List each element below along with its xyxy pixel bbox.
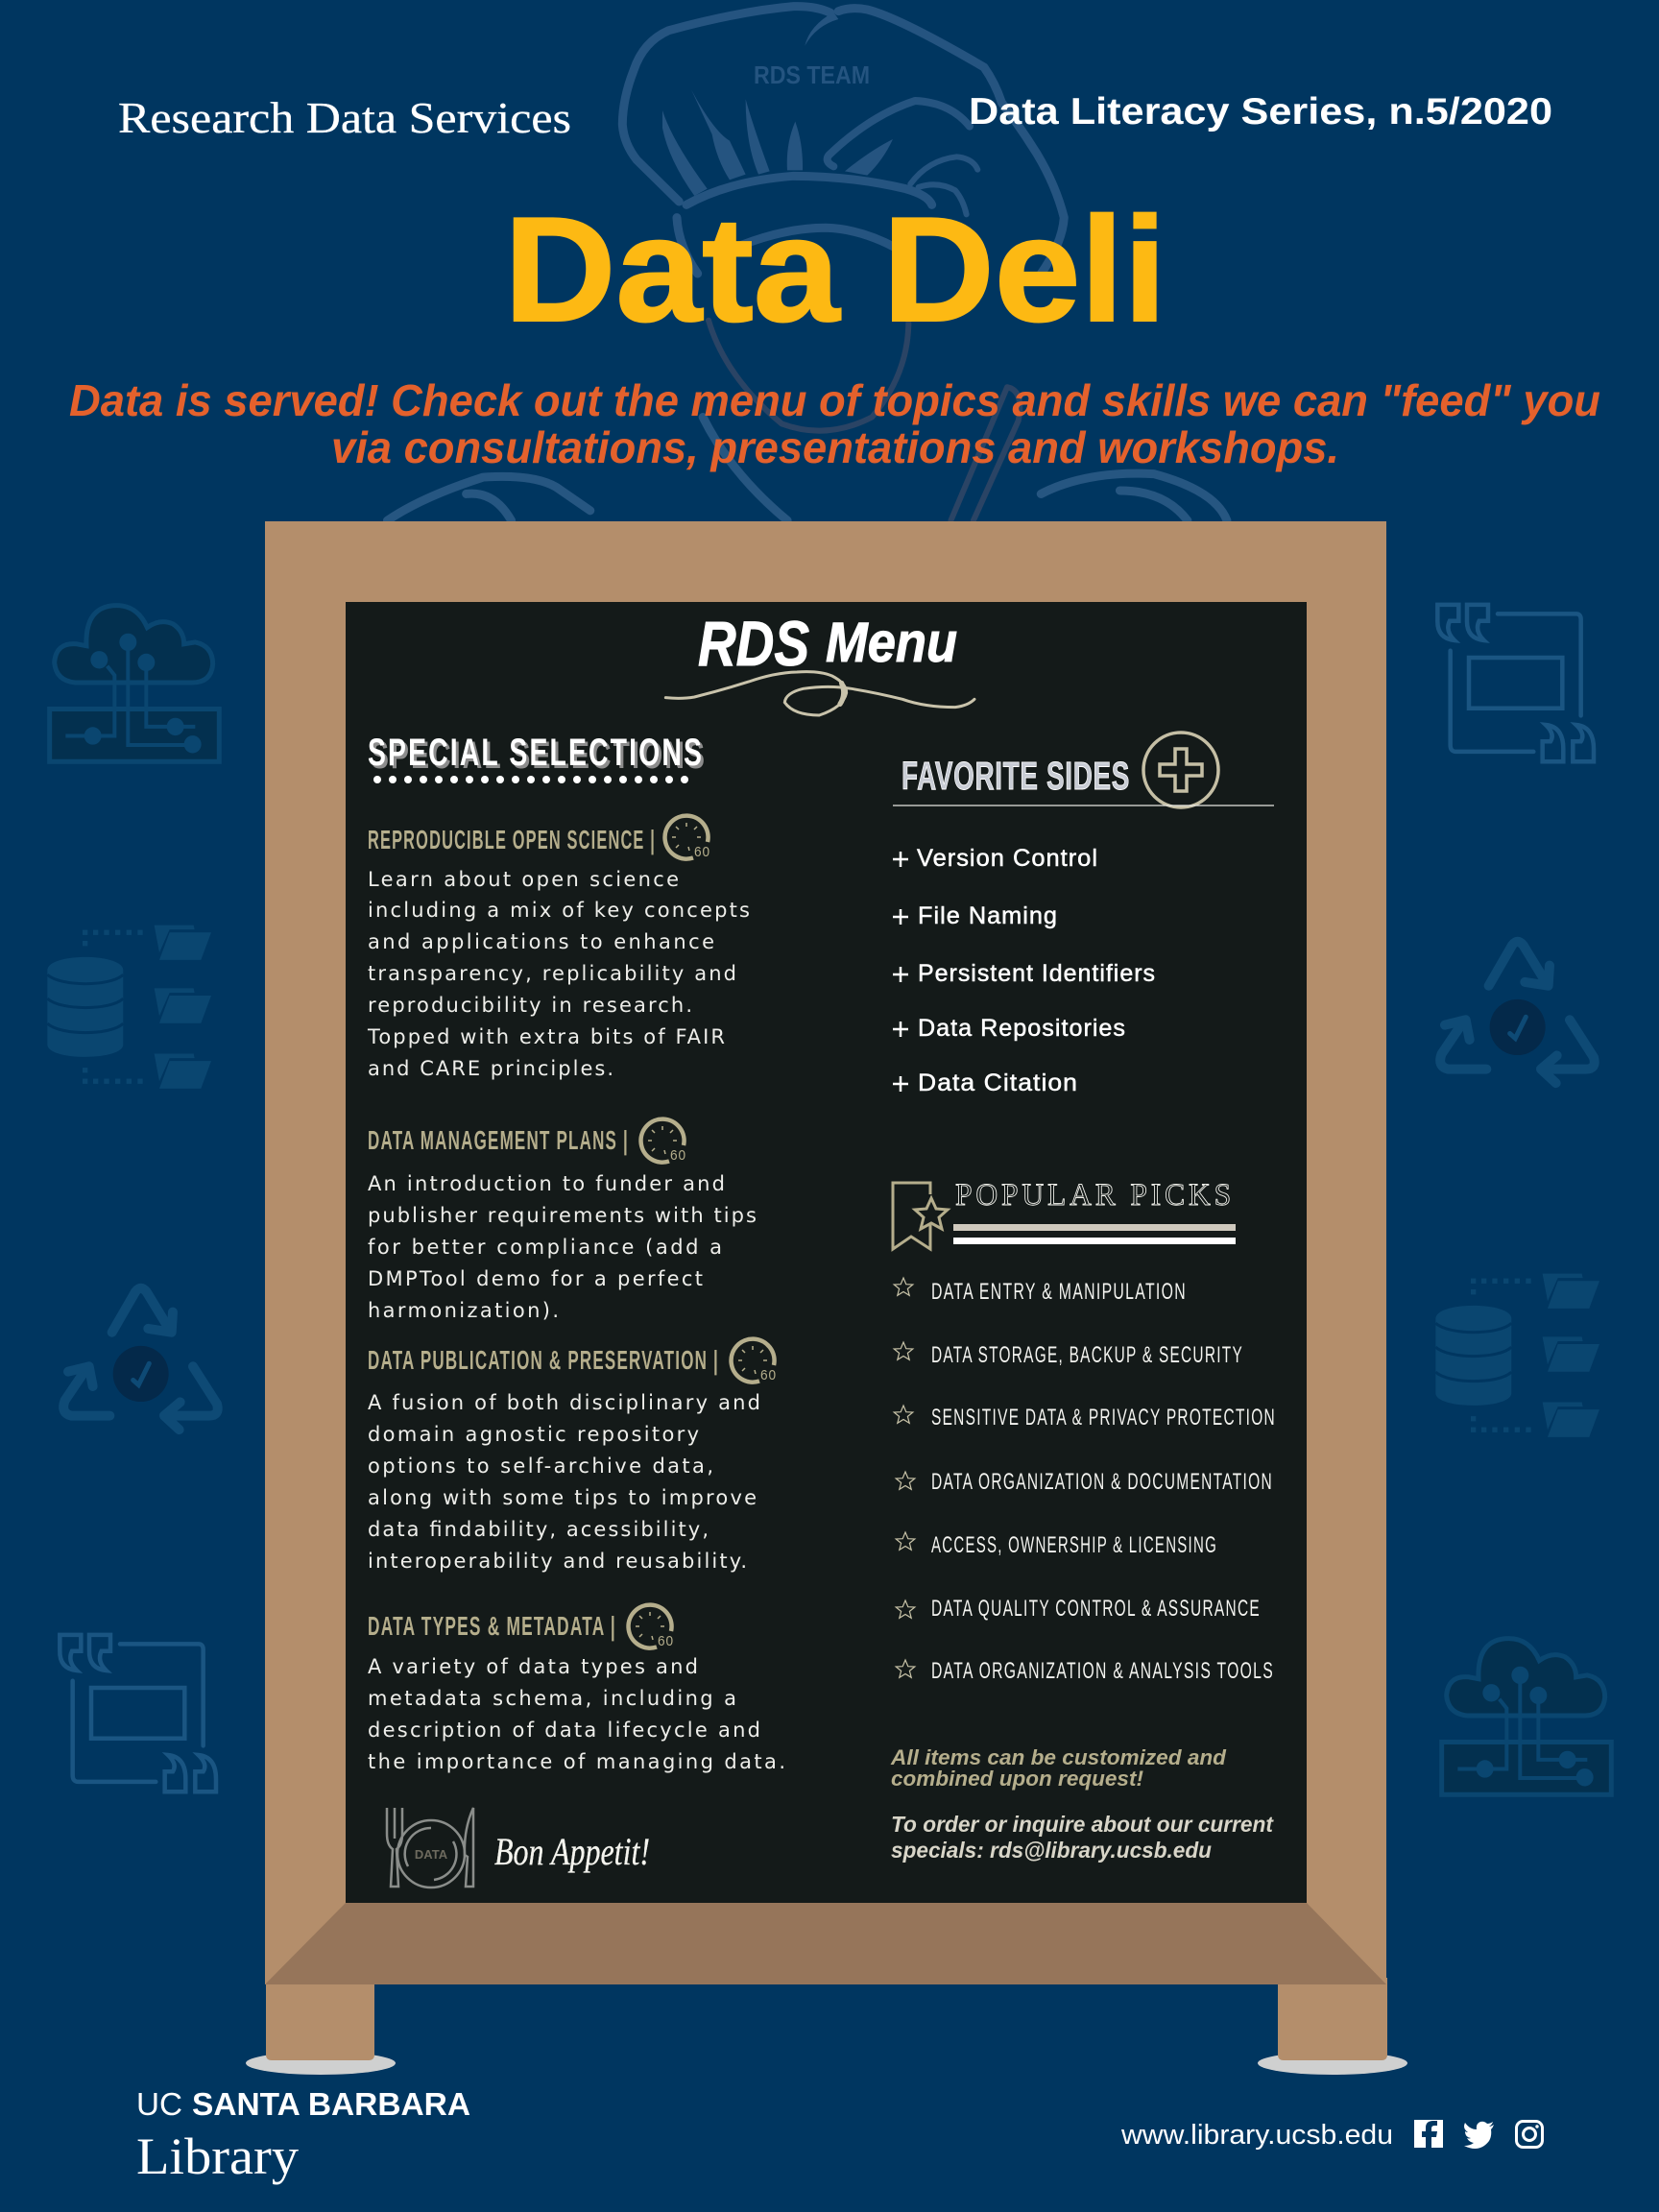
section: data types and metadata: [368, 1605, 785, 1773]
list of picks: DATA ENTRY & MANIPULATION: [931, 1279, 1187, 1305]
list of picks: [894, 1278, 1276, 1684]
list of sides: Data Repositories: [918, 1015, 1126, 1042]
logo: UC Santa Barbara Library: SANTA BARBARA: [192, 2086, 470, 2122]
section: data types and metadata: the importance of managing data.: [368, 1750, 785, 1773]
icon: bookmark star: [893, 1183, 948, 1249]
section: data management plans: publisher requirements with tips: [368, 1204, 757, 1227]
section: data publication and preservation: DATA PUBLICATION & PRESERVATION |: [368, 1345, 719, 1375]
section: reproducible open science: including a mix of key concepts: [368, 899, 750, 922]
icon: cloud left: [50, 606, 219, 761]
header: Research Data Services: Research Data Services: [118, 93, 571, 142]
section: data publication and preservation: 60: [760, 1367, 777, 1383]
icon: plate and cutlery: [387, 1808, 473, 1887]
note: customization: combined upon request!: [891, 1767, 1143, 1791]
subtitle: via consultations, presentations and workshops.: [331, 422, 1339, 472]
section: data types and metadata: 60: [658, 1633, 674, 1649]
list of picks: SENSITIVE DATA & PRIVACY PROTECTION: [931, 1405, 1276, 1431]
section: data management plans: 60: [670, 1147, 686, 1164]
section: reproducible open science: Learn about open science: [368, 868, 679, 891]
section: data management plans: harmonization).: [368, 1299, 559, 1322]
frame lower ledge: [265, 1903, 1386, 1984]
section: reproducible open science: transparency, replicability and: [368, 962, 736, 985]
swoosh: [665, 672, 974, 715]
icon: quote right: [1437, 605, 1594, 761]
subtitle: Data is served! Check out the menu of topics and skills we can "feed" you: [69, 375, 1600, 425]
note: customization: [890, 1745, 1227, 1791]
section: reproducible open science: reproducibility in research.: [368, 994, 692, 1017]
subtitle: [69, 375, 1600, 472]
section: reproducible open science: [367, 816, 750, 1080]
heading: special selections: SPECIAL SELECTIONS: [368, 732, 704, 774]
list of sides: Version Control: [917, 845, 1098, 872]
section: reproducible open science: Topped with extra bits of FAIR: [367, 1025, 725, 1048]
section: data publication and preservation: domain agnostic repository: [368, 1423, 699, 1446]
logo: UC Santa Barbara Library: Library: [136, 2128, 299, 2185]
panel: chalkboard: [346, 602, 1307, 1903]
list of picks: DATA ORGANIZATION & ANALYSIS TOOLS: [931, 1658, 1274, 1684]
section: data publication and preservation: [368, 1339, 777, 1573]
note: contact: To order or inquire about our current: [891, 1812, 1274, 1837]
menu title: Menu: [826, 612, 957, 674]
section: data publication and preservation: data findability, acessibility,: [368, 1518, 709, 1541]
icon: database right: [1435, 1274, 1599, 1437]
note: contact: specials: rds@library.ucsb.edu: [891, 1838, 1212, 1863]
logo: UC Santa Barbara Library: [136, 2086, 470, 2185]
icon: chef watermark: [387, 7, 1227, 520]
watermark label: RDS TEAM: [754, 60, 870, 89]
icon: instagram: [1517, 2122, 1542, 2147]
dotted rule: [373, 776, 688, 783]
section: data management plans: [368, 1119, 757, 1322]
icon: quote left: [60, 1635, 216, 1791]
logo: UC Santa Barbara Library: UC: [136, 2086, 182, 2122]
list of picks: DATA QUALITY CONTROL & ASSURANCE: [931, 1596, 1261, 1622]
section: data publication and preservation: along with some tips to improve: [368, 1486, 757, 1509]
section: data management plans: for better compliance (add a: [368, 1236, 722, 1259]
section: data management plans: DMPTool demo for a perfect: [368, 1267, 703, 1290]
section: data publication and preservation: interoperability and reusability.: [368, 1550, 747, 1573]
sign-off: Bon Appetit!: [494, 1830, 650, 1873]
header: series label: Data Literacy Series, n.5/2020: [969, 91, 1552, 132]
section: data types and metadata: description of data lifecycle and: [368, 1719, 760, 1742]
wooden frame: [265, 521, 1386, 1984]
section: data management plans: An introduction to funder and: [368, 1172, 725, 1195]
panel: popular picks: [893, 1178, 1276, 1684]
section: data types and metadata: metadata schema, including a: [368, 1687, 736, 1710]
section: data publication and preservation: A fusion of both disciplinary and: [368, 1391, 760, 1414]
list of sides: File Naming: [918, 902, 1058, 929]
icon: cloud right: [1442, 1639, 1611, 1794]
icon: recycle left: [63, 1288, 218, 1430]
note: contact: [891, 1812, 1274, 1863]
list of sides: [893, 845, 1156, 1096]
panel: special selections: [367, 732, 785, 1773]
easel legs: [266, 1978, 1387, 2060]
icon: database left: [47, 926, 211, 1089]
section: reproducible open science: and applications to enhance: [368, 930, 714, 953]
icon: plate and cutlery: DATA: [415, 1847, 448, 1862]
panel: favorite sides: [893, 733, 1274, 1096]
section: reproducible open science: and CARE principles.: [368, 1057, 613, 1080]
menu title: RDS: [698, 608, 809, 679]
section: reproducible open science: REPRODUCIBLE OPEN SCIENCE |: [368, 825, 656, 854]
list of picks: ACCESS, OWNERSHIP & LICENSING: [931, 1532, 1217, 1558]
footer url: www.library.ucsb.edu: [1120, 2120, 1393, 2151]
icon: recycle right: [1440, 942, 1595, 1083]
list of picks: DATA ORGANIZATION & DOCUMENTATION: [931, 1469, 1273, 1495]
icon: twitter: [1464, 2122, 1494, 2149]
title: Data Deli: [504, 186, 1166, 352]
icon: circled plus: [1143, 733, 1218, 807]
list of sides: Data Citation: [918, 1070, 1078, 1096]
section: data publication and preservation: options to self-archive data,: [368, 1455, 713, 1478]
list of sides: Persistent Identifiers: [918, 960, 1156, 987]
heading: special selections: SPECIAL SELECTIONS: [371, 734, 707, 777]
heading: special selections: [368, 732, 707, 777]
easel stand shadows: [246, 2052, 1407, 2075]
section: data types and metadata: DATA TYPES & METADATA |: [368, 1611, 616, 1641]
section: data types and metadata: A variety of data types and: [368, 1655, 698, 1678]
heading: favorite sides: FAVORITE SIDES: [902, 754, 1130, 798]
menu title: [698, 608, 957, 679]
heading: popular picks: POPULAR PICKS: [955, 1178, 1235, 1213]
note: customization: All items can be customized and: [890, 1745, 1227, 1769]
section: data management plans: DATA MANAGEMENT PLANS |: [368, 1125, 629, 1155]
section: reproducible open science: 60: [694, 844, 710, 860]
icon: facebook: [1414, 2120, 1443, 2148]
list of picks: DATA STORAGE, BACKUP & SECURITY: [931, 1342, 1243, 1368]
